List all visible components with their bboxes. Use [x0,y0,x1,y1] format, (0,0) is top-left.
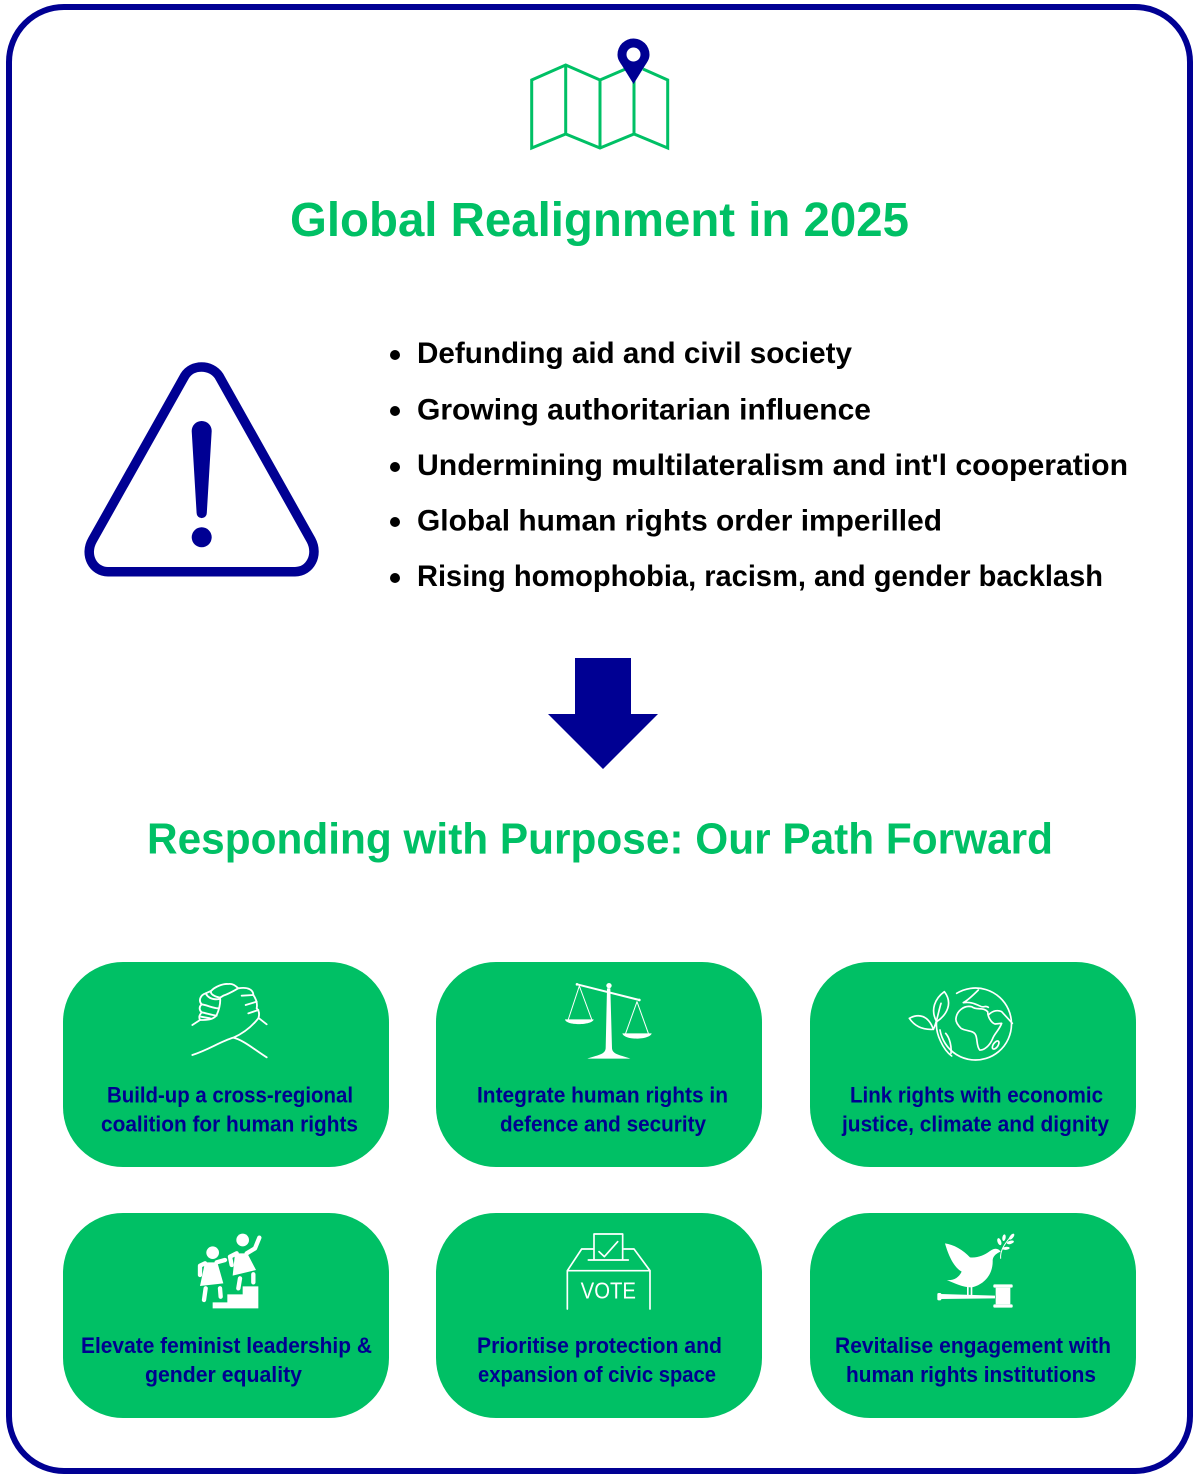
arrow: down [548,658,658,769]
panel: human rights institutions [810,1213,1136,1418]
title: Global Realignment in 2025 [290,194,909,247]
panel: cross-regional coalition: coalition for human rights [101,1112,358,1136]
panel: feminist leadership: gender equality [145,1362,302,1387]
panel: cross-regional coalition [63,962,389,1167]
icon: girls climbing steps [200,1234,259,1308]
label: Link rights with economic [850,1082,1103,1108]
icon: warning triangle [89,367,314,572]
bullet list: global threats: Undermining multilateralism and int'l cooperation [417,449,1128,482]
panel: civic space: expansion of civic space [478,1362,716,1387]
panel: economic justice and climate: justice, climate and dignity [841,1112,1109,1136]
icon: scales of justice [565,983,652,1059]
bullet list: global threats: Global human rights order imperilled [417,504,942,538]
bullet list: global threats: Growing authoritarian influence [417,394,871,426]
panel: human rights institutions: human rights institutions [846,1362,1096,1387]
heading: path forward: Responding with Purpose: Our Path Forward [147,814,1053,864]
icon: ballot box [567,1234,650,1309]
panel: civic space [436,1213,762,1418]
bullet list: global threats: Defunding aid and civil society [417,337,852,370]
icon: folded map with location pin [532,38,668,148]
label: Revitalise engagement with [835,1333,1111,1358]
icon: dove on gavel [937,1233,1015,1308]
panel: human rights in defence [436,962,762,1167]
label: Build-up a cross-regional [107,1082,353,1108]
icon: globe with leaves [909,988,1012,1060]
panel: economic justice and climate [810,962,1136,1167]
label: Integrate human rights in [477,1082,728,1108]
icon: ballot box: VOTE [581,1277,636,1303]
bullet list: global threats: Rising homophobia, racism, and gender backlash [417,560,1103,593]
label: Prioritise protection and [477,1333,722,1358]
icon: clasped hands [192,984,267,1057]
bullet list: global threats [390,337,1128,593]
label: Elevate feminist leadership & [81,1333,372,1358]
panel: human rights in defence: defence and security [500,1112,706,1136]
panel: feminist leadership [63,1213,389,1418]
